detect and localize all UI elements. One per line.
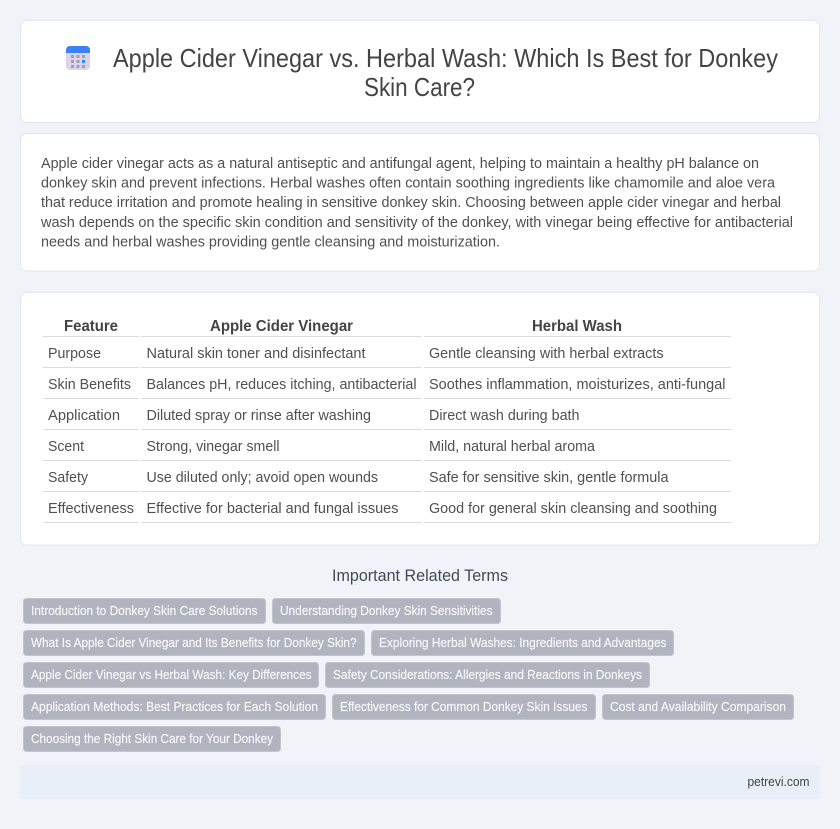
tag: what is ACV [24, 630, 364, 656]
tag: key differences: Apple Cider Vinegar vs Herbal Wash: Key Differences [31, 668, 312, 682]
tag: cost [602, 694, 794, 720]
row: scent: Scent [48, 439, 84, 455]
tag: herbal washes [372, 630, 674, 656]
tag: herbal washes: Exploring Herbal Washes: Ingredients and Advantages [379, 636, 666, 650]
summary text: needs and herbal washes providing gentle cleansing and moisturization. [41, 234, 500, 250]
row: effectiveness: Effective for bacterial and fungal issues [146, 501, 398, 517]
row: safety [48, 470, 669, 486]
row: effectiveness: Effectiveness [48, 501, 134, 517]
tag: effectiveness [332, 694, 596, 720]
panel: header [20, 20, 820, 122]
row: skin benefits [48, 377, 726, 393]
title [113, 43, 778, 102]
summary text: wash depends on the specific skin condition and sensitivity of the donkey, with vinegar being effective for antibacterial [40, 215, 793, 231]
tag: choosing [24, 726, 280, 752]
row: application: Application [48, 408, 120, 424]
row: scent [48, 439, 596, 455]
summary text: Apple cider vinegar acts as a natural antiseptic and antifungal agent, helping to maintain a healthy pH balance on [41, 156, 759, 172]
row: purpose: Gentle cleansing with herbal extracts [429, 346, 664, 362]
icon: calendar [66, 46, 90, 70]
tag: key differences [24, 662, 318, 688]
table header row: Apple Cider Vinegar [210, 318, 353, 335]
tag: what is ACV: What Is Apple Cider Vinegar and Its Benefits for Donkey Skin? [31, 636, 357, 650]
tag: application methods [24, 694, 326, 720]
footer: petrevi.com [748, 775, 810, 789]
tag: sensitivities: Understanding Donkey Skin Sensitivities [280, 604, 492, 618]
related term tags [24, 598, 794, 752]
tag: sensitivities [272, 598, 500, 624]
summary text: that reduce irritation and promote healing in sensitive donkey skin. Choosing between apple cider vinegar and herbal [41, 195, 781, 211]
row: safety: Use diluted only; avoid open wounds [146, 470, 378, 486]
row: application: Diluted spray or rinse after washing [146, 408, 371, 424]
tag: application methods: Application Methods: Best Practices for Each Solution [31, 700, 318, 714]
tag: introduction [24, 598, 266, 624]
row: skin benefits: Skin Benefits [48, 377, 131, 393]
summary text [40, 156, 793, 250]
tag: safety [326, 662, 650, 688]
title: Apple Cider Vinegar vs. Herbal Wash: Which Is Best for Donkey [113, 43, 778, 73]
heading: important related terms: Important Related Terms [332, 567, 508, 585]
tag: introduction: Introduction to Donkey Skin Care Solutions [31, 604, 258, 618]
table header row [64, 318, 622, 335]
row: effectiveness: Good for general skin cleansing and soothing [429, 501, 717, 517]
row: purpose: Natural skin toner and disinfectant [146, 346, 366, 362]
row: purpose: Purpose [48, 346, 101, 362]
row: skin benefits: Soothes inflammation, moisturizes, anti-fungal [429, 377, 726, 393]
row: application [48, 408, 580, 424]
table header row: Herbal Wash [532, 318, 622, 335]
tag: effectiveness: Effectiveness for Common Donkey Skin Issues [340, 700, 588, 714]
row: scent: Strong, vinegar smell [146, 439, 280, 455]
row: purpose [48, 346, 664, 362]
footer [20, 765, 820, 799]
row: safety: Safety [48, 470, 89, 486]
tag: cost: Cost and Availability Comparison [610, 700, 786, 714]
row: effectiveness [48, 501, 717, 517]
title: Skin Care? [364, 72, 475, 102]
row: safety: Safe for sensitive skin, gentle formula [429, 470, 669, 486]
tag: safety: Safety Considerations: Allergies and Reactions in Donkeys [333, 668, 642, 682]
row: scent: Mild, natural herbal aroma [429, 439, 596, 455]
tag: choosing: Choosing the Right Skin Care for Your Donkey [31, 732, 274, 746]
panel: comparison table [20, 292, 820, 545]
panel: summary paragraph [20, 134, 820, 271]
row: skin benefits: Balances pH, reduces itching, antibacterial [146, 377, 416, 393]
summary text: donkey skin and prevent infections. Herbal washes often contain soothing ingredients like chamomile and aloe vera [41, 176, 776, 192]
table header row: Feature [64, 318, 118, 335]
row: application: Direct wash during bath [429, 408, 580, 424]
